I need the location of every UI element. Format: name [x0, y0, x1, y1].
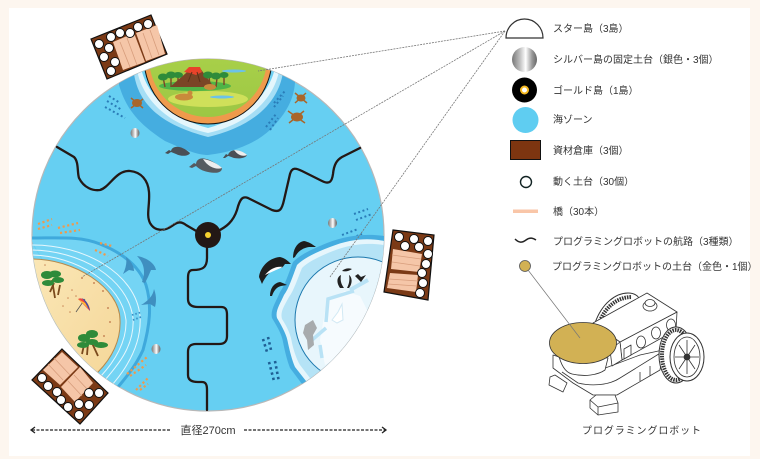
palm trees on beach — [41, 270, 108, 356]
legend icon: moving base — [520, 176, 532, 188]
dolphins: black — [259, 241, 316, 296]
legend text: robot base: プログラミングロボットの土台（金色・1個） — [552, 260, 758, 273]
legend icon: star island — [506, 19, 543, 38]
diameter arrow and label — [31, 424, 386, 437]
palm trees by volcano — [158, 72, 228, 87]
legend — [506, 19, 758, 273]
gold base cup — [558, 352, 608, 375]
fish: orange — [38, 219, 148, 390]
sea creatures: turtles — [131, 93, 307, 123]
programming robot — [528, 270, 704, 415]
legend icon: route — [515, 238, 536, 242]
rear wheel — [595, 293, 639, 323]
robot body — [553, 350, 663, 395]
penguin and polar zone — [272, 234, 384, 384]
panel: circular map — [31, 58, 385, 412]
leader line — [528, 270, 580, 338]
legend text: bridge: 橋（30本） — [553, 205, 604, 218]
dolphins: blue — [123, 256, 156, 307]
feet — [549, 375, 567, 392]
storage: top — [91, 15, 167, 79]
fish: small blue — [132, 312, 142, 320]
sea zone disc — [32, 59, 384, 411]
front wheel — [659, 327, 693, 383]
leader lines to star island icon — [82, 31, 505, 277]
sea creatures: blue fish — [105, 91, 372, 241]
legend text: storage: 資材倉庫（3個） — [553, 144, 629, 157]
legend text: sea zone: 海ゾーン — [553, 113, 592, 126]
storage: right — [384, 230, 434, 300]
legend text: silver base: シルバー島の固定土台（銀色・3個） — [553, 53, 719, 66]
fish: dark blue — [263, 337, 279, 382]
legend text: gold island: ゴールド島（1島） — [553, 84, 639, 97]
sea creatures: whales — [165, 147, 247, 173]
legend icon: bridge — [513, 210, 538, 213]
legend icon: storage — [510, 140, 540, 160]
gold island — [195, 222, 221, 248]
legend icon: robot base — [520, 260, 530, 272]
legend icon: gold island — [512, 78, 537, 102]
caption: programming robot: プログラミングロボット — [582, 424, 702, 437]
programming robot routes — [57, 147, 360, 410]
legend text: star island: スター島（3島） — [553, 22, 629, 35]
star island: volcano — [119, 59, 295, 155]
diameter arrow and label: 直径270cm — [180, 424, 236, 437]
star island: beach — [32, 218, 151, 391]
legend icon: silver base — [512, 47, 537, 72]
storage: left — [32, 349, 108, 424]
gold base — [550, 322, 616, 364]
silver island bases — [130, 128, 337, 354]
beach pebbles — [44, 264, 111, 337]
legend text: route: プログラミングロボットの航路（3種類） — [553, 235, 739, 248]
legend text: moving base: 動く土台（30個） — [553, 175, 634, 188]
legend icon: sea zone — [512, 107, 538, 133]
robot top box — [620, 312, 677, 360]
beach umbrella — [76, 298, 90, 312]
